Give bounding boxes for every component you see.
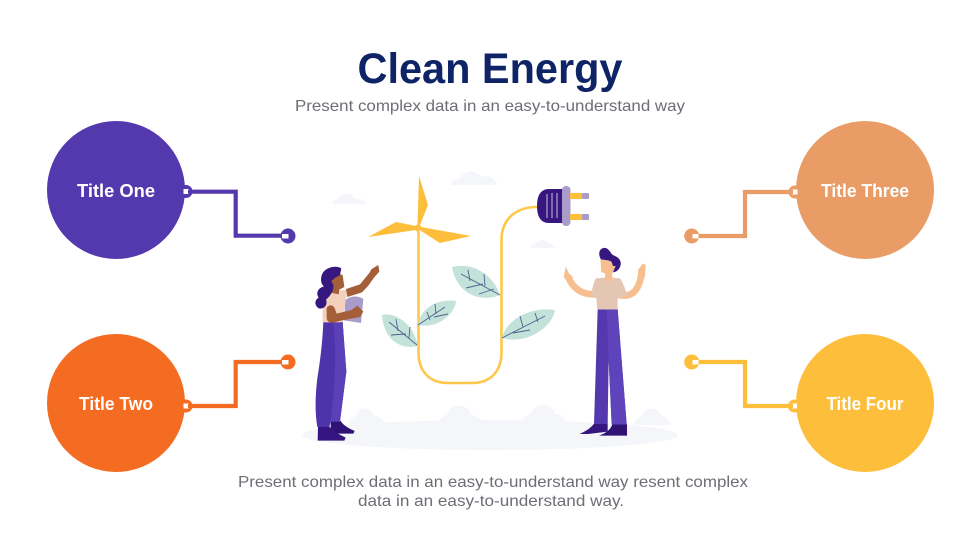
woman raised arm — [346, 265, 379, 297]
woman hair — [315, 267, 341, 309]
man shirt — [591, 278, 627, 309]
woman lower arm — [327, 305, 363, 323]
man figure — [564, 248, 646, 436]
footer text: data in an easy-to-understand way. — [358, 493, 624, 510]
man head and neck — [600, 258, 616, 281]
man right hand — [638, 263, 646, 277]
clipboard — [344, 297, 363, 323]
woman trousers — [316, 322, 346, 427]
woman figure — [315, 265, 379, 441]
woman shoes — [331, 421, 355, 434]
man trousers — [594, 309, 627, 424]
footer text — [238, 474, 748, 510]
node: title two: Title Two — [79, 394, 153, 414]
man right arm — [620, 277, 641, 296]
man shoes — [580, 423, 608, 434]
man hair — [599, 248, 621, 272]
title: Clean Energy — [358, 45, 623, 93]
footer text: Present complex data in an easy-to-understand way resent complex — [238, 474, 748, 491]
clouds — [332, 172, 556, 248]
power cord — [418, 207, 537, 383]
subtitle: Present complex data in an easy-to-understand way — [295, 98, 685, 115]
plug — [537, 186, 589, 226]
woman torso — [323, 290, 347, 322]
woman neck and face — [329, 273, 344, 294]
node: title three: Title Three — [821, 181, 909, 201]
wind turbine — [368, 176, 471, 243]
node: title three — [684, 121, 934, 259]
node: title one — [47, 121, 296, 259]
node: title four: Title Four — [826, 394, 904, 414]
man left arm — [568, 277, 596, 294]
man left hand — [564, 267, 573, 282]
node: title four — [684, 334, 934, 472]
ground with bushes — [302, 405, 678, 450]
node: title two — [47, 334, 296, 472]
node: title one: Title One — [77, 181, 155, 201]
leaves — [382, 266, 555, 347]
